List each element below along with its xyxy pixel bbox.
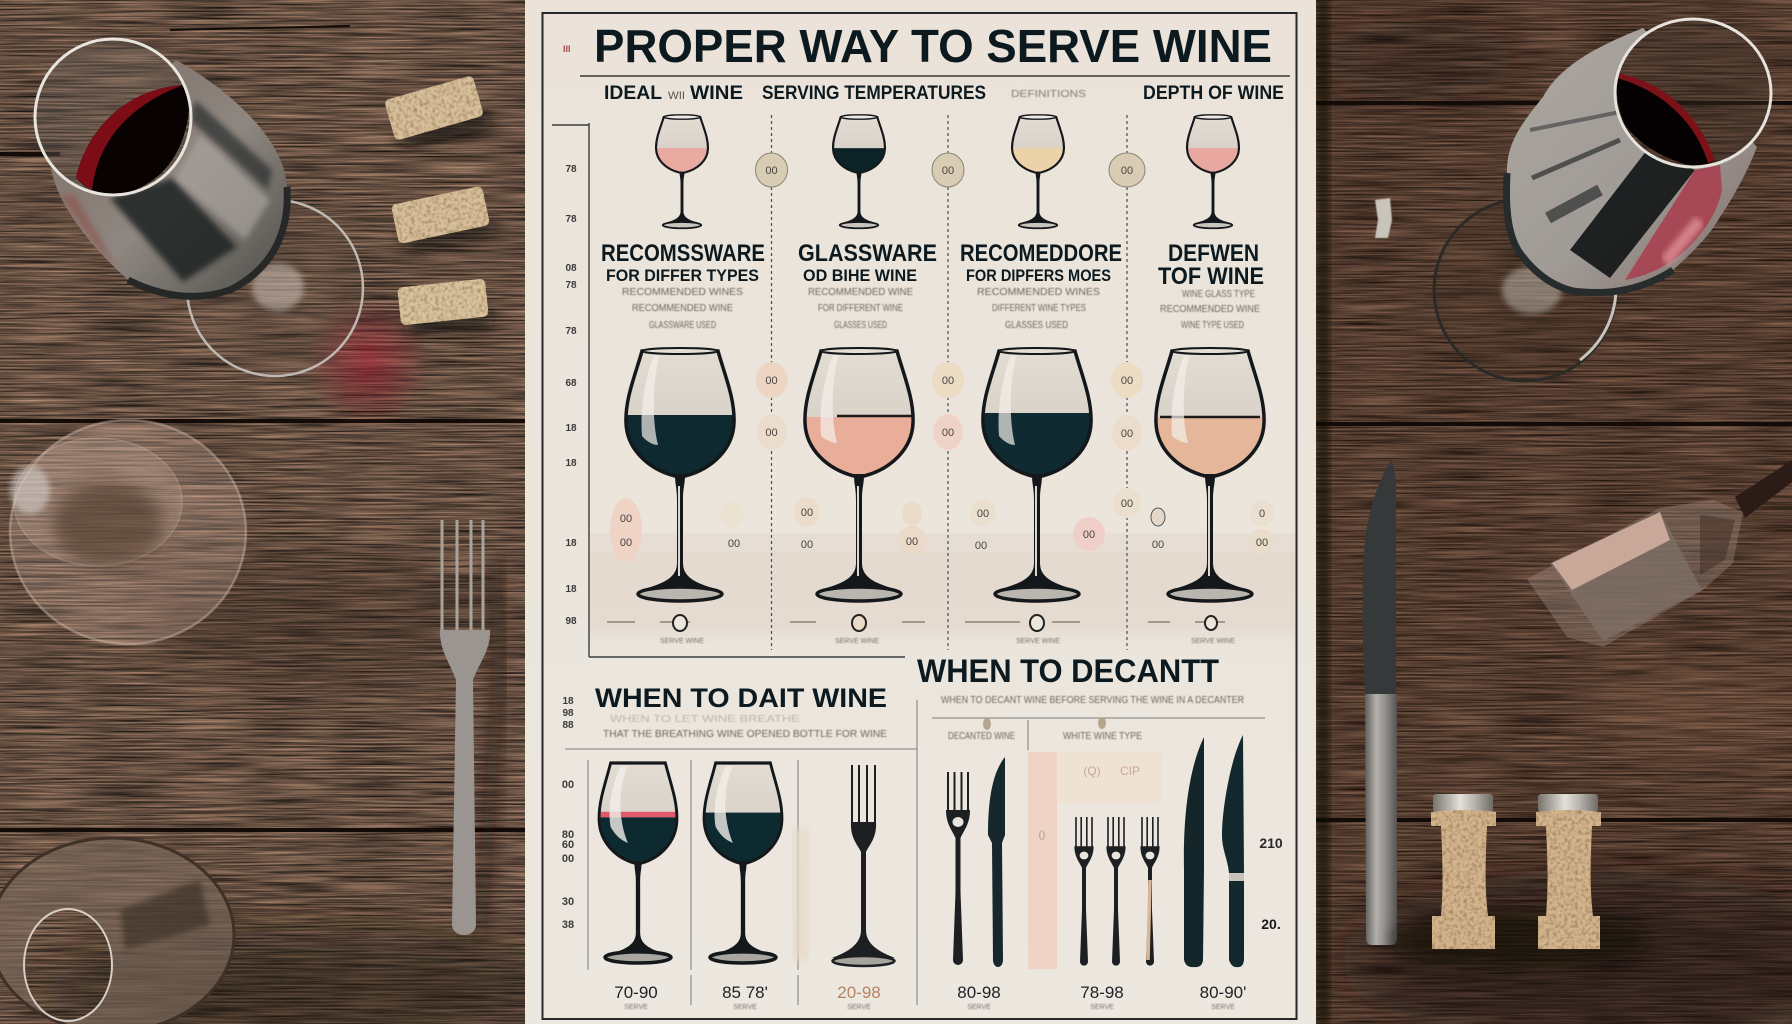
column 2 text: OD BIHE WINE	[803, 266, 917, 285]
divider medallions: 00	[942, 375, 954, 387]
section subheadings: IDEAL	[604, 83, 662, 104]
stem side medallions: 00	[801, 539, 813, 551]
column 1 text: GLASSWARE USED	[649, 320, 716, 331]
column 2 text: FOR DIFFERENT WINE	[818, 303, 903, 314]
section subheadings: DEFINITIONS	[1011, 89, 1086, 100]
column 2 text: RECOMMENDED WINE	[808, 287, 913, 298]
lower left tick labels	[562, 696, 574, 931]
lower left tick labels: 38	[562, 919, 574, 931]
blade	[1363, 459, 1396, 694]
temperature numbers and captions: 85 78'	[722, 983, 768, 1002]
stem side medallions: 00	[620, 513, 632, 525]
glass rim and wine	[1615, 19, 1771, 167]
divider medallions: 00	[1121, 375, 1133, 387]
lower left tick labels: 30	[562, 896, 574, 908]
label	[1550, 512, 1702, 641]
water tumbler: left upper	[10, 420, 246, 644]
bottom rulers with marks and captions	[607, 615, 1235, 645]
temperature numbers and captions: SERVE	[967, 1004, 991, 1011]
lower dividers	[565, 700, 1265, 1005]
lower left tick labels: 80	[562, 829, 574, 841]
column 4 text: RECOMMENDED WINE	[1160, 304, 1260, 315]
divider medallions	[756, 362, 1143, 518]
column 1 text: RECOMMENDED WINE	[632, 303, 733, 314]
bottle body	[1527, 500, 1743, 647]
cork 2	[391, 186, 490, 244]
wine glass: left top	[35, 39, 363, 376]
glass bowl	[1506, 28, 1757, 293]
upper medallions: 00	[765, 165, 778, 177]
left axis with tick labels	[552, 123, 905, 657]
temperature numbers and captions: 70-90	[614, 983, 658, 1002]
lower left tick labels: 98	[562, 708, 574, 719]
stem side medallions: 00	[977, 508, 989, 520]
section subheadings: DEPTH OF WINE	[1143, 83, 1284, 104]
column 4 text	[1158, 240, 1264, 331]
cork stoppers	[1390, 794, 1650, 970]
lower left tick labels: 00	[562, 853, 574, 865]
divider medallions: 00	[1121, 498, 1133, 510]
neck	[1735, 460, 1792, 518]
paper edge shadow	[1316, 0, 1330, 1024]
left axis with tick labels: 78	[565, 280, 577, 291]
title: PROPER WAY TO SERVE WINE	[594, 20, 1272, 72]
left axis with tick labels: 78	[565, 214, 577, 225]
column 1 text: RECOMSSWARE	[601, 240, 765, 267]
section subheadings: SERVING TEMPERATURES	[762, 83, 986, 104]
bottom rulers with marks and captions: SERVE WINE	[660, 638, 704, 645]
column 2 text: GLASSWARE	[798, 240, 937, 267]
temperature numbers and captions: 80-98	[957, 983, 1001, 1002]
glass rim and wine	[35, 39, 191, 195]
column 3 text: GLASSES USED	[1005, 320, 1068, 331]
right side labels: 210	[1259, 835, 1283, 851]
column 2 text	[798, 240, 937, 331]
pink strip panel: ()	[1039, 830, 1045, 841]
small cork fragment	[1375, 198, 1392, 238]
pink strip panel	[1028, 752, 1162, 969]
glass base	[187, 200, 363, 376]
knife 3	[1222, 735, 1244, 967]
faint engraving	[793, 829, 809, 960]
lower left tick labels: 18	[562, 696, 574, 707]
left axis with tick labels: 18	[565, 584, 577, 595]
column 3 text: RECOMEDDORE	[960, 240, 1122, 267]
upper medallions: 00	[942, 165, 954, 177]
stem side medallions: 00	[906, 536, 918, 548]
stem side medallions: 00	[1152, 539, 1164, 551]
knife on table	[1363, 459, 1405, 945]
stem side medallions: 00	[728, 538, 740, 550]
decant description text: WHEN TO DECANT WINE BEFORE SERVING THE WINE IN A DECANTER	[941, 695, 1244, 706]
temperature numbers and captions: 80-90'	[1200, 983, 1246, 1002]
lower left tick labels: 88	[562, 720, 574, 731]
large glass 4: rosé wine	[1150, 348, 1270, 601]
temperature numbers and captions	[614, 983, 1246, 1011]
decant small markers and labels: DECANTED WINE	[948, 731, 1015, 742]
temperature numbers and captions: SERVE	[624, 1004, 648, 1011]
stem side medallions: 00	[801, 507, 813, 519]
stem side medallions	[610, 497, 1275, 562]
column 3 text: FOR DIPFERS MOES	[966, 266, 1111, 285]
section subheadings: WINE	[690, 83, 743, 104]
stopper 1	[1431, 794, 1496, 949]
fork on table	[440, 520, 498, 940]
upper medallions: 00	[1121, 165, 1133, 177]
wine description text: WHEN TO LET WINE BREATHE	[610, 714, 800, 725]
column 2 text: GLASSES USED	[834, 320, 887, 331]
fork set	[1074, 817, 1160, 966]
glass bowl	[51, 60, 287, 296]
bottle lying on table	[1527, 460, 1792, 647]
left axis with tick labels: 78	[565, 326, 577, 337]
small glass: rosé	[653, 115, 711, 228]
temperature numbers and captions: 20-98	[837, 983, 881, 1002]
column 4 text: TOF WINE	[1158, 263, 1264, 290]
left axis with tick labels: 18	[565, 423, 577, 434]
stem side medallions: 00	[1083, 529, 1095, 541]
wine stain on table	[306, 296, 430, 428]
pink strip panel: CIP	[1120, 764, 1140, 778]
divider medallions: 00	[765, 375, 778, 387]
column 3 text: DIFFERENT WINE TYPES	[992, 303, 1086, 314]
divider medallions: 00	[765, 427, 778, 439]
column 1 text: RECOMMENDED WINES	[622, 287, 743, 298]
column 4 text: WINE GLASS TYPE	[1182, 289, 1255, 300]
small glass: red	[830, 115, 888, 228]
lower left tick labels: 60	[562, 839, 574, 851]
wine description text	[603, 714, 887, 740]
right side labels: 20.	[1261, 916, 1281, 932]
upper medallions	[756, 153, 1145, 187]
decant small markers and labels	[948, 717, 1142, 742]
bottom rulers with marks and captions: SERVE WINE	[1016, 638, 1060, 645]
left axis with tick labels: 08	[565, 263, 577, 274]
section heading: when to decant: WHEN TO DECANTT	[917, 653, 1219, 689]
right side labels	[1259, 835, 1283, 932]
left axis with tick labels: 68	[565, 378, 577, 389]
large glass 3: red wine	[977, 348, 1097, 601]
left axis with tick labels: 98	[565, 616, 577, 627]
section subheadings	[604, 83, 1284, 104]
temperature numbers and captions: SERVE	[733, 1004, 757, 1011]
small glass: rosé 2	[1184, 115, 1242, 228]
small tag by title: III	[563, 44, 571, 54]
temperature numbers and captions: SERVE	[1211, 1004, 1235, 1011]
divider medallions: 00	[942, 427, 954, 439]
infographic poster sheet	[525, 0, 1316, 1024]
left axis with tick labels: 18	[565, 458, 577, 469]
left axis with tick labels: 18	[565, 538, 577, 549]
handle	[1365, 694, 1397, 945]
divider medallions: 00	[1121, 428, 1133, 440]
temperature numbers and captions: SERVE	[1090, 1004, 1114, 1011]
stem side medallions: 00	[1256, 537, 1268, 549]
cork 3	[397, 279, 489, 325]
small glass: white	[1009, 115, 1067, 228]
bottom rulers with marks and captions: SERVE WINE	[835, 638, 879, 645]
stem side medallions: 0	[1259, 508, 1265, 520]
column 4 text: WINE TYPE USED	[1181, 320, 1244, 331]
pink strip panel: (Q)	[1083, 764, 1101, 778]
column 1 text	[601, 240, 765, 331]
decant small markers and labels: WHITE WINE TYPE	[1063, 731, 1142, 742]
cork 1	[384, 75, 484, 141]
section subheadings: WII	[668, 90, 685, 102]
column dividers	[772, 115, 1127, 650]
knife 2	[1184, 737, 1204, 967]
column 4 text: DEFWEN	[1168, 240, 1259, 267]
wine description text: THAT THE BREATHING WINE OPENED BOTTLE FOR WINE	[603, 729, 887, 740]
bottom rulers with marks and captions: SERVE WINE	[1191, 638, 1235, 645]
fork 1	[946, 772, 970, 965]
large glass 1: red wine	[620, 348, 740, 601]
standing fork with base	[832, 765, 895, 966]
glass base	[1434, 199, 1616, 381]
large glass 2: rosé wine	[799, 348, 919, 601]
column 1 text: FOR DIFFER TYPES	[606, 266, 759, 285]
temperature numbers and captions: 78-98	[1080, 983, 1124, 1002]
knife 1	[988, 757, 1005, 967]
lower shaded band	[590, 533, 1295, 552]
stopper 2	[1536, 794, 1601, 949]
corks: left group	[384, 75, 495, 326]
water tumbler: left lower	[0, 838, 234, 1024]
column 3 text	[960, 240, 1122, 331]
stem side medallions: 00	[975, 540, 987, 552]
section heading: when to dart wine: WHEN TO DAIT WINE	[595, 683, 887, 713]
stem side medallions: 00	[620, 537, 632, 549]
temperature numbers and captions: SERVE	[847, 1004, 871, 1011]
column 3 text: RECOMMENDED WINES	[977, 287, 1100, 298]
lower glass 1	[595, 763, 681, 963]
wine glass: right top	[1434, 19, 1771, 381]
lower glass 2	[700, 763, 786, 963]
left axis with tick labels: 78	[565, 164, 577, 175]
lower left tick labels: 00	[562, 779, 574, 791]
